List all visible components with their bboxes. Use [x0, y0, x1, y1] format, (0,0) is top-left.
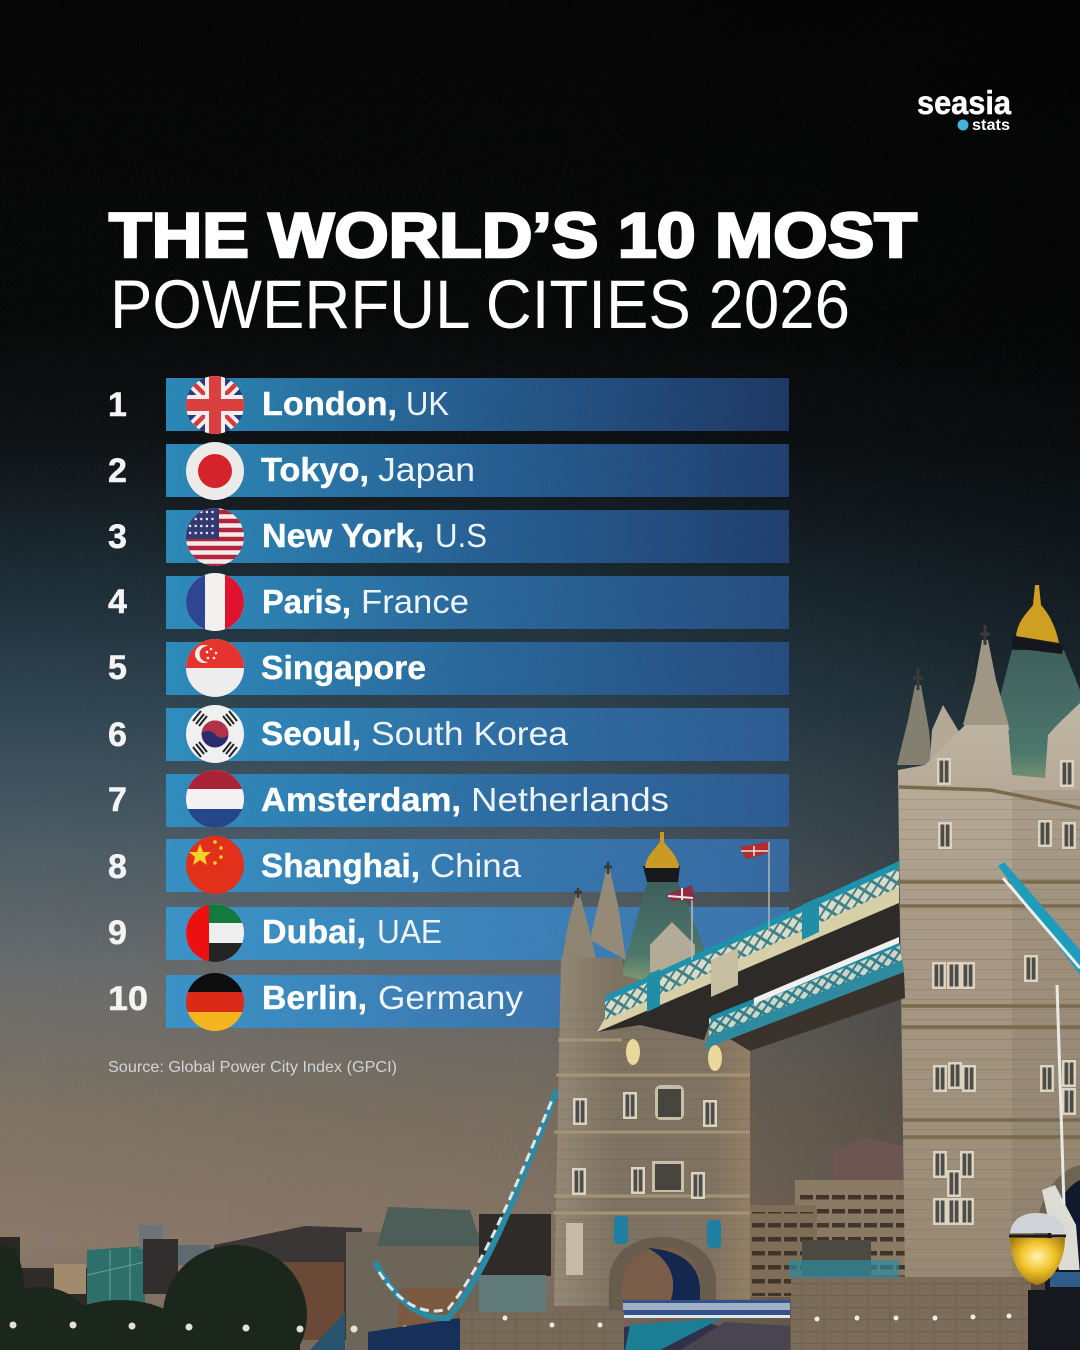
skyline: left riverbank [0, 1207, 551, 1350]
low bridge and suspension cable, left [310, 1090, 557, 1350]
street lamp [1009, 1213, 1066, 1350]
flag: Netherlands [185, 769, 245, 829]
row 3 rank and name: New York, [262, 517, 424, 554]
upper walkway [597, 861, 900, 1040]
row 6 rank and name: South Korea [371, 715, 569, 752]
right tower windows [932, 758, 1076, 1225]
low walkway in foreground [623, 1300, 790, 1350]
right tower [897, 585, 1080, 1280]
left tower [553, 832, 750, 1310]
row 5 rank and name [108, 649, 426, 687]
row 6 rank and name: Seoul, [261, 715, 361, 752]
row 5 rank and name: 5 [108, 649, 127, 687]
left tower gold crown [643, 832, 680, 882]
left tower dormer [650, 922, 695, 972]
row 2 rank and name: Japan [378, 451, 475, 488]
row 4 rank and name [108, 583, 469, 621]
row 10 rank and name: 10 [108, 980, 148, 1018]
row 7 rank and name [108, 781, 669, 819]
left walkway lamps [626, 1039, 722, 1071]
trees [0, 1245, 307, 1350]
row 8 rank and name [108, 847, 522, 886]
title: POWERFUL CITIES 2026 [110, 266, 850, 343]
title: THE WORLD’S 10 MOST [109, 201, 917, 271]
walkway underside [597, 903, 900, 1040]
left tower cornices [553, 1040, 750, 1213]
left tower shields [614, 1216, 721, 1248]
walkway posts [647, 897, 819, 1012]
right tower body [898, 703, 1080, 1280]
row 7 rank and name: 7 [108, 781, 127, 819]
flag: France [185, 572, 245, 632]
row 1 rank and name: London, [262, 385, 397, 422]
row 10 rank and name: Germany [378, 979, 524, 1016]
row 3 rank and name [108, 517, 487, 556]
row 6 rank and name [108, 715, 569, 754]
lower walkway [704, 937, 905, 1051]
row 1 rank and name: UK [406, 385, 449, 422]
right tower spires [897, 625, 1010, 770]
row 8 rank and name: 8 [108, 848, 127, 886]
row 10 rank and name: Berlin, [262, 979, 367, 1016]
row 1 rank and name: 1 [108, 386, 127, 424]
left tower windows [566, 1085, 717, 1275]
source note: Source: Global Power City Index (GPCI) [108, 1059, 397, 1076]
flag: China [185, 835, 245, 895]
row 4 rank and name: 4 [108, 583, 127, 621]
flag: South Korea [185, 704, 245, 764]
flag: Singapore [185, 638, 245, 698]
row 9 rank and name: UAE [377, 913, 442, 950]
row 1 rank and name [108, 385, 449, 424]
back buildings between towers [747, 1137, 907, 1297]
flag: union jack on roof [666, 885, 695, 960]
row 9 rank and name: 9 [108, 914, 127, 952]
row 2 rank and name: Tokyo, [261, 451, 369, 488]
left tower green roof [621, 882, 707, 985]
lamp row on riverbank [10, 1322, 408, 1332]
flag: Germany [185, 972, 245, 1032]
row 4 rank and name: France [361, 583, 469, 620]
flag: Japan [185, 441, 245, 501]
stone river walls [460, 1260, 1080, 1350]
flag: St George on pole [740, 842, 769, 930]
flag: United States [185, 507, 245, 567]
left tower arch [609, 1237, 716, 1310]
right tower cornices [899, 787, 1080, 1137]
right tower crown [1012, 585, 1064, 654]
row 8 rank and name: Shanghai, [261, 847, 420, 884]
right tower green roof [998, 650, 1080, 795]
row 6 rank and name: 6 [108, 716, 127, 754]
row 4 rank and name: Paris, [262, 583, 351, 620]
right bridge cable [998, 862, 1080, 1205]
row 2 rank and name [108, 451, 475, 490]
left tower spires [562, 862, 626, 960]
logo dot [958, 120, 968, 130]
left tower body [554, 958, 750, 1306]
flag: UAE [185, 903, 245, 963]
right tower arch [1030, 1165, 1080, 1275]
logo: stats [972, 117, 1010, 134]
row 3 rank and name: 3 [108, 518, 127, 556]
row 2 rank and name: 2 [108, 452, 127, 490]
row 7 rank and name: Netherlands [471, 781, 669, 818]
title [109, 201, 917, 343]
row 8 rank and name: China [430, 847, 522, 884]
row 7 rank and name: Amsterdam, [261, 781, 461, 818]
row 10 rank and name [108, 979, 524, 1018]
row 9 rank and name [108, 913, 442, 952]
row 9 rank and name: Dubai, [262, 913, 366, 950]
ranking bars [166, 378, 789, 1028]
row 3 rank and name: U.S [435, 517, 487, 554]
flag: United Kingdom [185, 375, 245, 435]
row 5 rank and name: Singapore [261, 649, 426, 686]
logo: seasia [917, 84, 1012, 121]
